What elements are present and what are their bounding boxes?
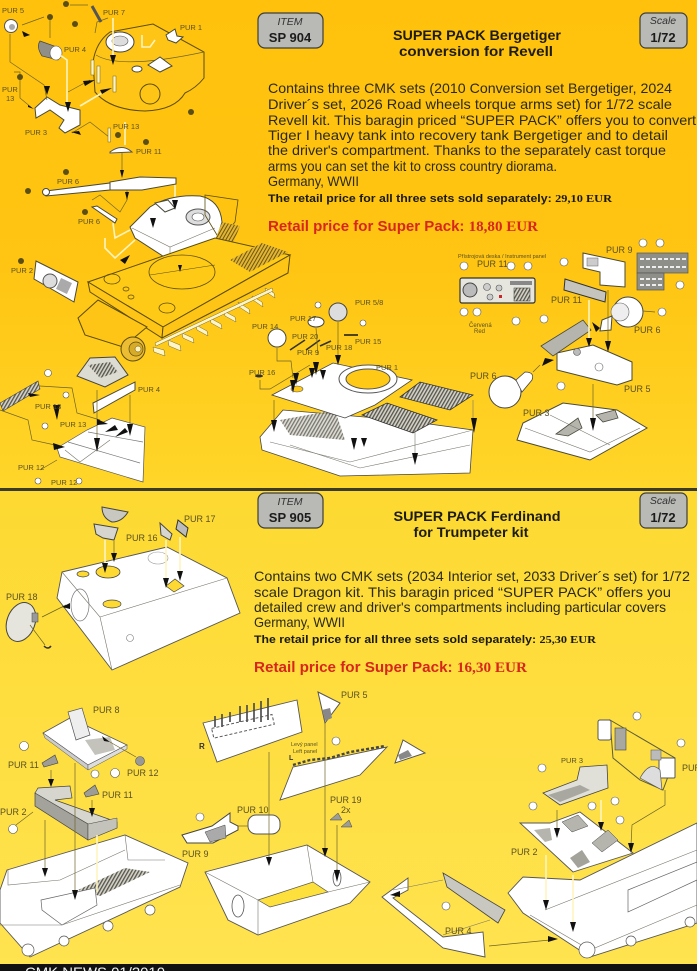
diagram: turret and hull assembly xyxy=(0,5,290,482)
heading: Bergetiger: SUPER PACK Bergetiger xyxy=(393,28,562,43)
panel: SP 904 Bergetiger xyxy=(0,1,696,487)
connector lines xyxy=(260,322,473,462)
heading: Ferdinand xyxy=(394,509,560,540)
part labels: SP 904: PUR 14 xyxy=(252,322,278,331)
casemate box xyxy=(57,547,240,670)
part labels: SP 904: PUR 15 xyxy=(355,337,381,346)
part labels: SP 904: PUR 1 xyxy=(180,23,202,32)
part labels: SP 904: PUR 17 xyxy=(290,314,316,323)
footer bar xyxy=(0,964,700,971)
PUR 18 disc xyxy=(1,598,51,648)
part labels: SP 905: PUR 17 xyxy=(184,514,216,524)
part labels: SP 904: PUR 9 xyxy=(297,348,319,357)
grill plates xyxy=(400,382,473,410)
panel: SP 905 background xyxy=(0,491,700,964)
retail price line: The retail price for all three sets sold separately: 29,10 EUR xyxy=(268,193,613,205)
diagram: Ferdinand centre parts xyxy=(182,692,425,935)
part: engine block xyxy=(77,357,128,387)
engine deck part xyxy=(91,24,204,111)
diagram: driver compartment assembly xyxy=(255,303,473,476)
corner piece xyxy=(395,740,425,763)
part labels: SP 904: Červená xyxy=(469,322,492,329)
connector lines xyxy=(393,790,665,946)
connector lines xyxy=(12,742,136,895)
text block: Ferdinand description: Contains two CMK sets (2034 Interior set, 2033 Driver´s set) for 1/72 xyxy=(254,569,690,584)
scale badge 1/72: Scale xyxy=(650,15,676,27)
part: gun barrel xyxy=(42,177,176,196)
part labels: SP 904: PUR 12 xyxy=(18,463,44,472)
part labels: SP 905: PUR 9 xyxy=(182,849,209,859)
part labels: SP 905: Levý panel xyxy=(291,742,318,748)
seat plate xyxy=(520,812,633,872)
part labels: SP 904: PUR 3 xyxy=(523,408,550,418)
part labels: SP 904: PUR 13 xyxy=(35,402,61,411)
part labels: SP 905: PUR 5 xyxy=(341,690,368,700)
part labels: SP 904: 13 xyxy=(6,94,14,103)
heading: Bergetiger xyxy=(393,28,562,59)
PUR 3 part xyxy=(543,765,608,805)
part labels: SP 904: PUR 6 xyxy=(634,325,661,335)
retail price line: The retail price for all three sets sold separately: 25,30 EUR xyxy=(254,634,597,646)
PUR 8 headlamp xyxy=(600,297,643,331)
scale badge 1/72: Scale xyxy=(650,495,676,507)
diagram: Ferdinand left hull xyxy=(0,708,188,957)
part labels: SP 904: PUR 11 xyxy=(551,295,582,305)
part labels: SP 905: PUR 10 xyxy=(237,805,269,815)
scale badge 1/72 xyxy=(640,493,687,528)
PUR 8 slab xyxy=(43,708,127,770)
text block: Bergetiger description: Contains three CMK sets (2010 Conversion set Bergetiger, 2024 xyxy=(268,81,672,96)
part labels: SP 904: PUR xyxy=(2,85,18,94)
panel divider xyxy=(0,488,700,491)
text block: Bergetiger description: arms you can set the kit to cross country diorama. xyxy=(268,159,557,174)
part labels: SP 904: PUR 6 xyxy=(470,371,497,381)
part: PUR 4 strip xyxy=(93,382,135,413)
item badge SP 905: ITEM xyxy=(277,496,303,508)
text block: Bergetiger description: the driver's compartment. Thanks to the separately cast torque xyxy=(268,143,666,158)
torque arms row xyxy=(153,288,275,356)
part labels: SP 904: PUR 18 xyxy=(326,343,352,352)
part labels: SP 905: PUR 2 xyxy=(0,807,27,817)
gear block PUR 5 xyxy=(541,320,632,385)
hull left xyxy=(0,835,188,957)
part labels: SP 904: PUR 5 xyxy=(624,384,651,394)
heading: Ferdinand: SUPER PACK Ferdinand xyxy=(394,509,560,524)
part labels: SP 905: L xyxy=(289,755,294,762)
turret xyxy=(130,196,222,262)
text block: Bergetiger description: Tiger I heavy tank into recovery tank Bergetiger and to detail xyxy=(268,128,668,143)
part labels: SP 904: PUR 4 xyxy=(138,385,160,394)
strip PUR 11 xyxy=(564,279,606,302)
part: PUR 7 rod xyxy=(92,6,101,22)
arrowheads: SP 904 xyxy=(22,31,611,465)
part labels: SP 904: PUR 13 xyxy=(60,420,86,429)
item badge SP 904: SP 904 xyxy=(269,30,312,45)
part labels: SP 905: PUR 8 xyxy=(93,705,120,715)
PUR 9 gun part xyxy=(182,813,238,843)
diagram: Ferdinand right hull xyxy=(382,720,697,958)
PUR 2 beam xyxy=(35,786,117,840)
PUR 10 cylinder xyxy=(248,815,280,834)
hatch parts xyxy=(94,507,188,540)
scale badge 1/72 xyxy=(640,13,687,48)
part labels: SP 904: PUR 2 xyxy=(11,266,33,275)
part labels: SP 905: PUR 12 xyxy=(127,768,159,778)
arrowheads: SP 905 xyxy=(42,553,634,942)
panel R xyxy=(203,698,302,762)
part labels: SP 904: PUR 11 xyxy=(136,147,162,156)
part labels: SP 905: PUR 19 xyxy=(330,795,362,805)
PUR 11 and 12 small parts xyxy=(42,755,144,797)
part labels: SP 904: PUR 5 xyxy=(2,6,24,15)
connector lines xyxy=(42,537,180,617)
part labels: SP 905: PUR 4 xyxy=(445,926,472,936)
bracket PUR 3 xyxy=(35,97,80,133)
hull body xyxy=(88,238,290,338)
tub xyxy=(205,845,370,935)
small parts xyxy=(255,303,358,378)
heading: Bergetiger: conversion for Revell xyxy=(399,44,553,59)
text block: Bergetiger description: Driver´s set, 2026 Road wheels torque arms set) for 1/72 scale xyxy=(268,97,672,112)
super pack price: Retail price for Super Pack: 18,80 EUR xyxy=(268,219,539,235)
item badge SP 905: SP 905 xyxy=(269,510,311,525)
connector lines lower left xyxy=(0,386,130,470)
connector lines xyxy=(533,290,655,420)
diagram: Ferdinand casemate xyxy=(1,507,240,670)
hull body white xyxy=(260,410,473,476)
part labels: SP 904: PUR 6 xyxy=(57,177,79,186)
panel: SP 904 background xyxy=(0,0,700,489)
part labels: SP 904: PUR 7 xyxy=(103,8,125,17)
hull front and wheel xyxy=(78,300,147,361)
item badge SP 904 xyxy=(258,13,323,48)
PUR 19 small parts xyxy=(330,813,352,827)
scale badge 1/72: 1/72 xyxy=(650,30,676,45)
part labels: SP 904: PUR 5/8 xyxy=(355,298,383,307)
heading: Ferdinand: for Trumpeter kit xyxy=(414,525,529,540)
text block: Bergetiger description xyxy=(268,81,696,189)
super pack price: Retail price for Super Pack: 16,30 EUR xyxy=(254,660,528,676)
part labels: SP 904: PUR 3 xyxy=(25,128,47,137)
hull right xyxy=(508,823,697,958)
engine base PUR 3 xyxy=(517,403,647,460)
part labels: SP 904: Red xyxy=(474,329,485,335)
part labels: SP 905: 2x xyxy=(341,805,351,815)
part: hatch PUR 11 xyxy=(110,148,132,153)
panel L xyxy=(280,746,387,800)
bulb PUR 6 xyxy=(489,372,533,408)
part labels: SP 904: PUR 1 xyxy=(376,363,398,372)
scale badge 1/72: 1/72 xyxy=(650,510,676,525)
connector lines xyxy=(238,723,337,870)
text block: Ferdinand description: Germany, WWII xyxy=(254,615,345,630)
text block: Bergetiger description: Germany, WWII xyxy=(268,174,359,189)
part labels: SP 905: PUR 3 xyxy=(561,756,583,765)
part labels: SP 905: PUR 11 xyxy=(8,760,39,770)
top right panel xyxy=(598,720,675,790)
part labels: SP 904: PUR 6 xyxy=(78,217,100,226)
part labels: SP 905: PUR 11 xyxy=(102,790,133,800)
connector lines xyxy=(10,5,175,258)
part labels: SP 904: PUR 9 xyxy=(606,245,633,255)
part labels: SP 904: PUR 4 xyxy=(64,45,86,54)
item badge SP 904: ITEM xyxy=(277,16,303,28)
part labels: SP 904: PUR 12 xyxy=(51,478,77,487)
part labels: SP 904: PUR 16 xyxy=(249,368,275,377)
text block: Ferdinand description xyxy=(254,569,690,630)
top plate with ring PUR 1 xyxy=(272,363,412,418)
text block: Ferdinand description: scale Dragon kit. This baragin priced “SUPER PACK” offers you xyxy=(254,585,671,600)
part labels: SP 904 xyxy=(2,6,661,487)
text block: Bergetiger description: Revell kit. This baragin priced “SUPER PACK” offers you to convert xyxy=(268,113,696,128)
part labels: SP 904: PUR 11 xyxy=(477,259,508,269)
callout markers: SP 905 xyxy=(8,712,685,910)
part labels: SP 904: Přístrojová deska / Instrument panel xyxy=(458,254,546,260)
PUR 4 frame xyxy=(382,873,505,957)
part labels: SP 905: PUR 18 xyxy=(6,592,38,602)
text block: Ferdinand description: detailed crew and driver's compartments including particular covers xyxy=(254,600,666,615)
part labels: SP 905: PUR 2 xyxy=(511,847,538,857)
hull front wedge xyxy=(57,418,145,482)
right edge strip xyxy=(697,0,700,971)
part labels: SP 904: PUR 13 xyxy=(113,122,139,131)
part: PUR 2 front plate xyxy=(34,261,78,302)
part labels: SP 905: Left panel xyxy=(293,749,317,755)
PUR 5 small plate xyxy=(318,692,340,723)
panel: SP 905 Ferdinand xyxy=(0,493,700,958)
decal sheet xyxy=(637,253,688,290)
diagram: interior parts right xyxy=(460,253,688,460)
PUR 5 and PUR 4 parts xyxy=(4,20,62,60)
item badge SP 905 xyxy=(258,493,323,528)
box PUR 9 xyxy=(583,253,625,287)
part labels: SP 904: PUR 20 xyxy=(292,332,318,341)
part: dark strip xyxy=(0,381,40,411)
callout markers: SP 904 xyxy=(17,1,194,264)
part labels: SP 905: R xyxy=(199,742,205,751)
instrument panel xyxy=(460,278,535,303)
part labels: SP 905: PUR 16 xyxy=(126,533,158,543)
part: PUR 6 blade xyxy=(92,206,117,223)
rear rack xyxy=(205,195,240,246)
part labels: SP 905 xyxy=(0,514,700,936)
